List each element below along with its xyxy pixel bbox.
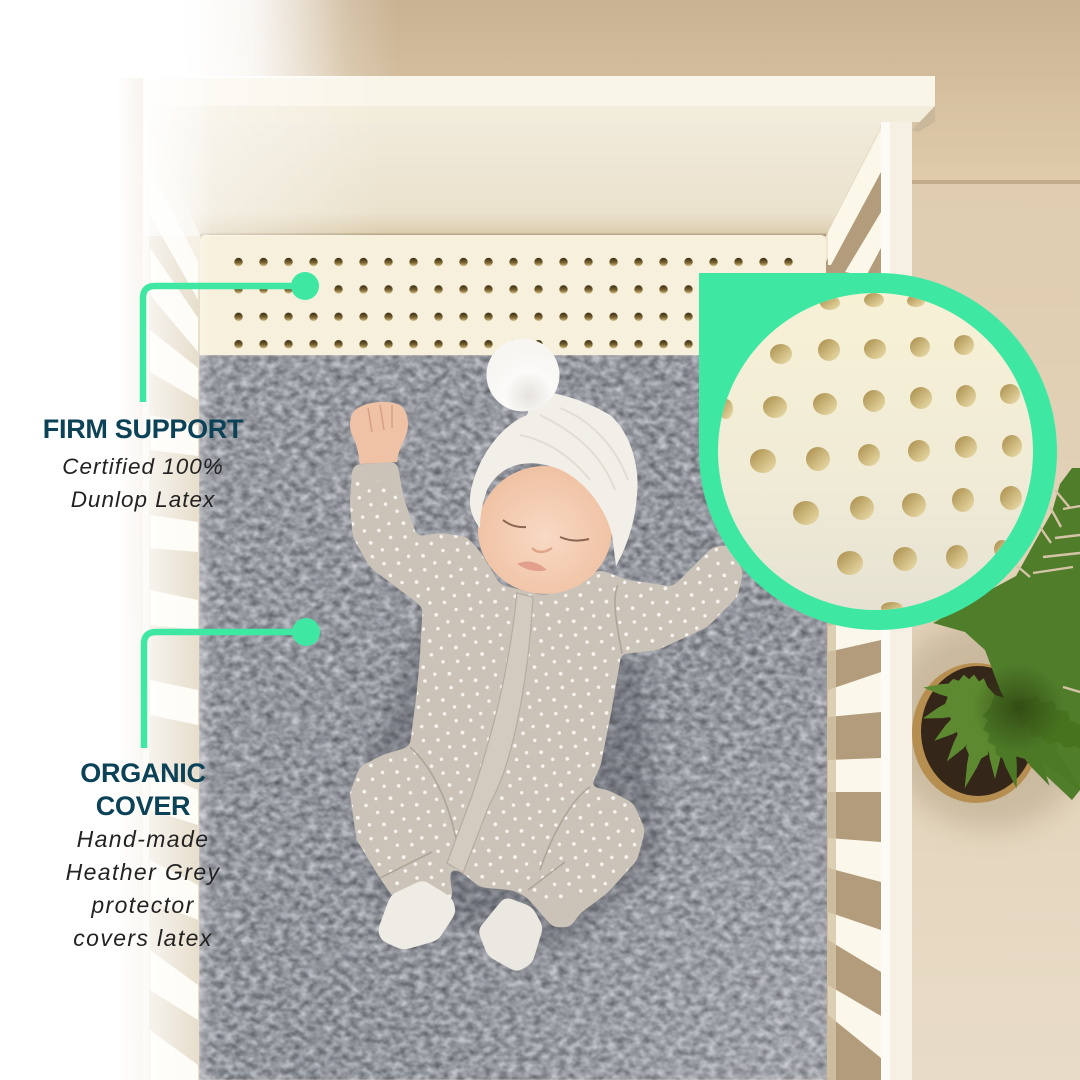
magnified latex detail callout bbox=[699, 273, 1057, 630]
label: firm support: Certified 100% bbox=[62, 454, 224, 479]
right post bbox=[881, 115, 912, 1080]
right slats bbox=[826, 118, 885, 1080]
left slats bbox=[143, 118, 200, 1080]
head bbox=[478, 466, 612, 594]
folds bbox=[380, 585, 622, 890]
label: firm support: FIRM SUPPORT bbox=[43, 414, 243, 444]
crib frame bbox=[143, 76, 935, 1080]
pointer: firm support bbox=[143, 272, 319, 402]
label: organic cover: Hand-made bbox=[77, 826, 209, 852]
label: firm support: Dunlop Latex bbox=[71, 487, 215, 512]
top wall fade overlay bbox=[0, 0, 420, 78]
terracotta pot bbox=[912, 663, 1040, 803]
label: firm support bbox=[43, 414, 244, 512]
label: organic cover: COVER bbox=[96, 791, 190, 821]
label: organic cover: ORGANIC bbox=[80, 758, 206, 788]
top rail bbox=[143, 76, 935, 132]
sleeping baby bbox=[345, 338, 750, 972]
label: organic cover: covers latex bbox=[73, 925, 213, 951]
label: organic cover: protector bbox=[91, 892, 195, 918]
zipper placket bbox=[447, 593, 533, 873]
label: organic cover bbox=[66, 758, 220, 951]
sleepsuit body, arms and legs bbox=[345, 462, 750, 927]
upper fern frond bbox=[933, 468, 1080, 800]
label: organic cover: Heather Grey bbox=[66, 859, 220, 885]
top rail fade overlay bbox=[143, 76, 383, 236]
raised fist bbox=[350, 402, 408, 464]
socks bbox=[378, 880, 543, 972]
knit hat with pompom bbox=[470, 338, 638, 566]
lower fern fronds bbox=[917, 669, 1080, 806]
left white fade overlay bbox=[0, 0, 212, 1080]
organic grey cover bbox=[199, 355, 827, 1080]
magnified holes bbox=[719, 293, 1022, 614]
inner end panel bbox=[148, 118, 885, 236]
latex mattress with ventilation holes bbox=[200, 235, 826, 360]
baby shadow bbox=[360, 610, 660, 950]
pointer: organic cover bbox=[144, 618, 320, 748]
plant in pot bbox=[912, 468, 1080, 806]
